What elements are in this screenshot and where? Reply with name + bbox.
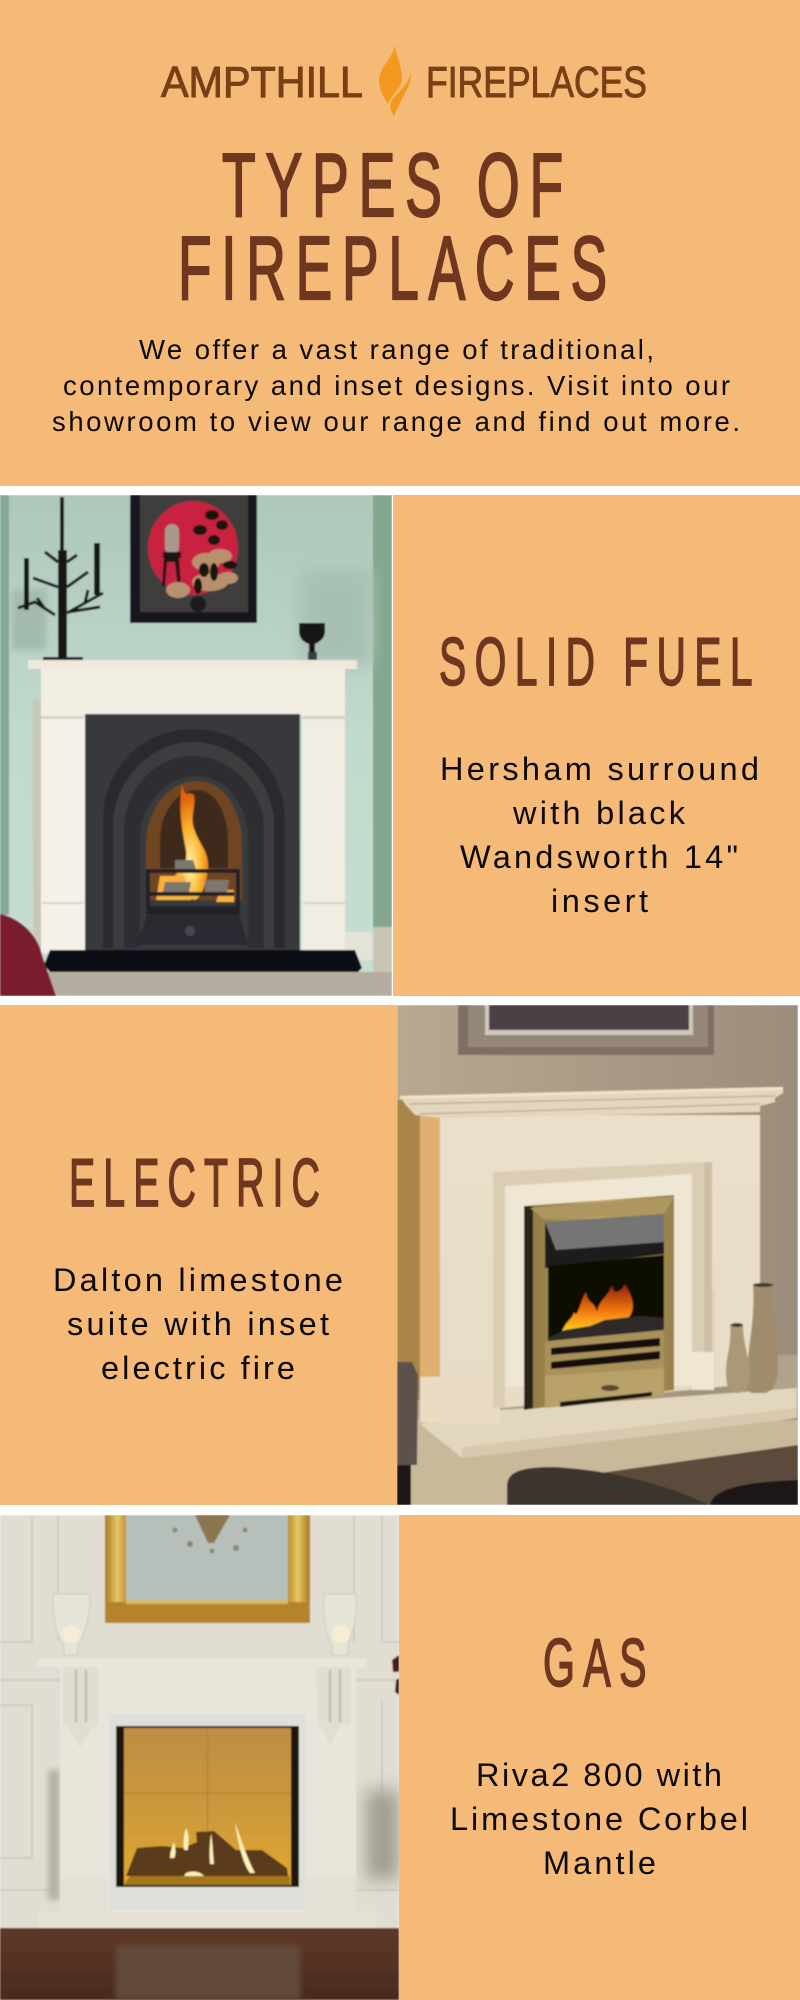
panel: gas text (399, 1515, 800, 2000)
fire box (116, 1726, 299, 1887)
flower at right (392, 1655, 399, 1695)
flames (172, 785, 208, 900)
firebox (548, 1255, 664, 1339)
ash pan (133, 915, 250, 945)
floor (397, 1420, 798, 1505)
title (178, 136, 617, 319)
caption: solid fuel: with black (512, 795, 686, 831)
flames (562, 1284, 633, 1332)
vases (726, 1283, 778, 1393)
black insert (85, 714, 300, 950)
mantel side (397, 1100, 422, 1400)
inner moulding (493, 1162, 714, 1408)
caption: gas: Mantle (543, 1845, 656, 1881)
armchair (397, 1362, 418, 1505)
chandelier (172, 1515, 248, 1554)
logo (161, 45, 647, 116)
gold mirror (105, 1515, 310, 1623)
corbels (63, 1667, 351, 1748)
glass candle holder right (324, 1594, 356, 1655)
framed picture (458, 1005, 714, 1055)
caption: electric: electric fire (101, 1350, 295, 1386)
sofa (507, 1467, 710, 1505)
intro text: contemporary and inset designs. Visit into our (63, 370, 730, 401)
wall panelling (0, 1515, 400, 1890)
logo: FIREPLACES (426, 58, 647, 107)
icon: flame (379, 45, 411, 116)
glass vase (298, 622, 326, 661)
caption: solid fuel: Wandsworth 14" (460, 839, 738, 875)
framed picture (130, 495, 257, 623)
inner surround (109, 1714, 306, 1910)
caption: electric: suite with inset (67, 1306, 329, 1342)
photo: solid fuel fireplace (0, 495, 392, 996)
intro text (52, 334, 740, 437)
grille (545, 1330, 664, 1376)
intro text: We offer a vast range of traditional, (139, 334, 654, 365)
fire opening (146, 781, 242, 900)
panel: header (0, 0, 800, 486)
caption: electric (53, 1262, 343, 1386)
limestone mantel (38, 1659, 366, 1912)
coals (163, 860, 229, 892)
arched fire insert (103, 729, 285, 948)
photo: gas fireplace (0, 1515, 400, 2000)
caption: solid fuel: insert (551, 883, 648, 919)
hearth plinth (38, 1912, 376, 1928)
hearth (44, 950, 362, 972)
photo: electric fireplace (397, 1005, 798, 1505)
soft shadows on the wall (366, 1790, 399, 1880)
red chair (0, 914, 56, 996)
glass candle holder left (53, 1594, 90, 1655)
intro text: showroom to view our range and find out more. (52, 406, 740, 437)
caption: gas: Limestone Corbel (450, 1801, 748, 1837)
mantel shelf (400, 1087, 783, 1118)
panel: solid fuel text (393, 495, 800, 996)
mantel surround (28, 660, 357, 953)
caption: gas (450, 1757, 748, 1881)
fire back panel (124, 1728, 291, 1885)
hearth (420, 1388, 797, 1458)
logs (126, 1831, 288, 1876)
caption: electric: Dalton limestone (53, 1262, 343, 1298)
grate bars (146, 869, 240, 916)
coals (548, 1316, 664, 1341)
rug (600, 1445, 798, 1505)
heading: gas: GAS (543, 1625, 655, 1701)
candle tree (18, 497, 103, 660)
wooden floor (0, 1928, 399, 2000)
carpet (0, 972, 392, 996)
caption: gas: Riva2 800 with (476, 1757, 722, 1793)
electric fire (524, 1195, 674, 1410)
fire hood (544, 1214, 664, 1251)
caption: solid fuel (440, 751, 759, 919)
mantel body (440, 1115, 760, 1424)
heading: electric: ELECTRIC (69, 1145, 328, 1221)
title: TYPES OF (222, 136, 573, 236)
caption: solid fuel: Hersham surround (440, 751, 759, 787)
panel: electric text (0, 1005, 397, 1505)
gas flames (170, 1822, 255, 1876)
logo: AMPTHILL (161, 58, 363, 107)
